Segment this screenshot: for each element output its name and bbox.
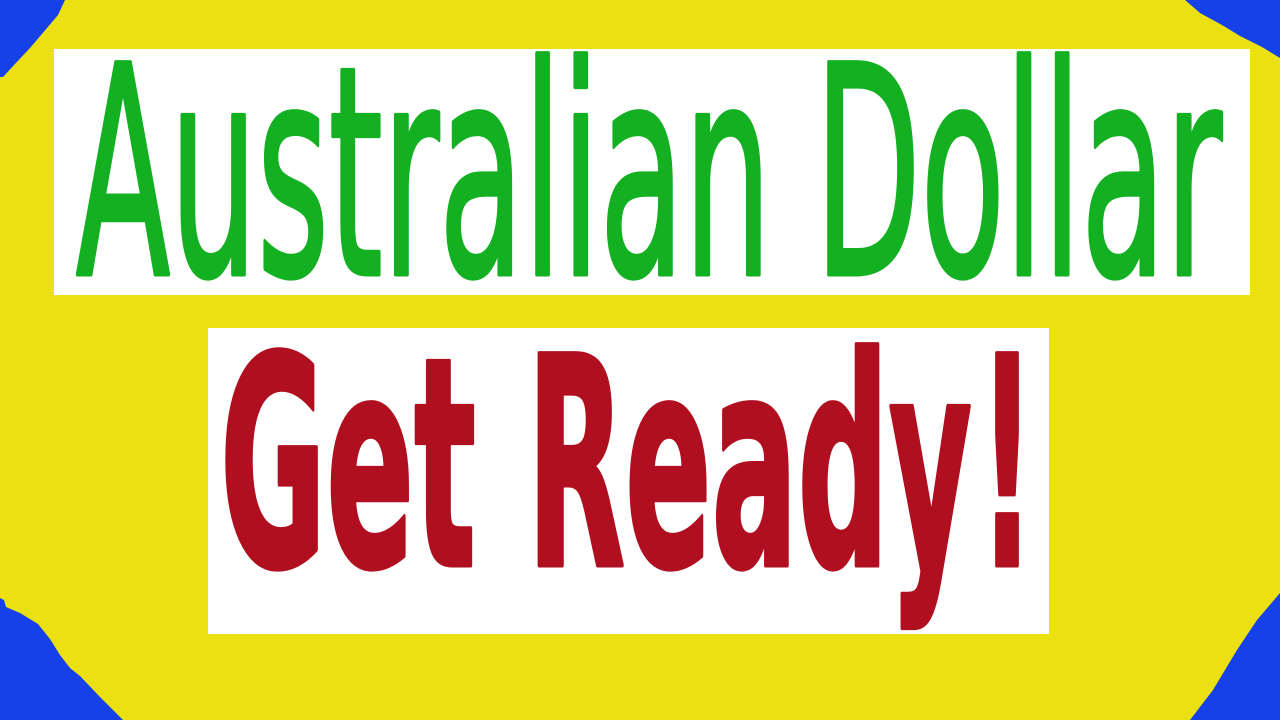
heading: Get Ready!: Get	[220, 297, 476, 634]
corner: bottom left blue	[0, 598, 123, 720]
corner: top left blue	[0, 0, 65, 77]
panel: Get Ready banner	[208, 297, 1049, 634]
corner: bottom right blue	[1190, 593, 1280, 720]
corner: top right blue	[1185, 0, 1280, 58]
panel: Get Ready banner: !	[979, 297, 1035, 634]
